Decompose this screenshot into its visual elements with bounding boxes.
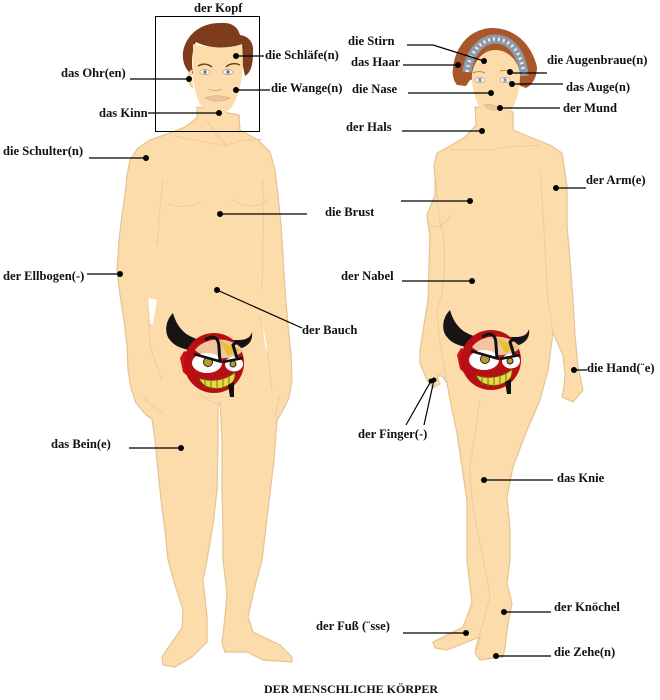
labels: die Augenbraue(n) <box>547 53 647 67</box>
woman headband <box>467 39 524 76</box>
icon: devil on man <box>166 313 252 397</box>
labels: der Arm(e) <box>586 173 646 187</box>
labels: die Nase <box>352 82 398 96</box>
labels: der Ellbogen(-) <box>3 269 84 283</box>
leader lines and dots <box>87 45 587 659</box>
woman face <box>472 50 520 121</box>
labels: das Haar <box>351 55 401 69</box>
labels: der Finger(-) <box>358 427 427 441</box>
labels: der Kopf <box>194 1 243 15</box>
labels: das Auge(n) <box>566 80 630 94</box>
man body <box>117 107 292 667</box>
icon: devil on woman <box>443 310 529 394</box>
labels: der Nabel <box>341 269 394 283</box>
labels: der Mund <box>563 101 617 115</box>
man face <box>189 44 243 116</box>
labels: der Fuß (¨sse) <box>316 619 390 633</box>
labels: die Schläfe(n) <box>265 48 339 62</box>
labels: das Bein(e) <box>51 437 111 451</box>
figure: man <box>117 23 292 667</box>
woman hair <box>453 28 537 88</box>
labels: die Schulter(n) <box>3 144 83 158</box>
labels: die Brust <box>325 205 375 219</box>
woman body <box>420 107 583 660</box>
figure: woman <box>420 28 583 660</box>
man body contour lines <box>143 120 280 418</box>
labels: der Bauch <box>302 323 357 337</box>
box: der Kopf <box>156 16 260 132</box>
woman body contour lines <box>428 146 553 650</box>
labels: das Kinn <box>99 106 148 120</box>
labels: der Hals <box>346 120 392 134</box>
labels: die Hand(¨e) <box>587 361 655 375</box>
man hair <box>183 23 253 76</box>
title: DER MENSCHLICHE KÖRPER <box>264 682 438 696</box>
labels: die Zehe(n) <box>554 645 615 659</box>
labels: die Wange(n) <box>271 81 342 95</box>
labels: der Knöchel <box>554 600 620 614</box>
labels: das Ohr(en) <box>61 66 126 80</box>
labels: das Knie <box>557 471 605 485</box>
labels: die Stirn <box>348 34 395 48</box>
